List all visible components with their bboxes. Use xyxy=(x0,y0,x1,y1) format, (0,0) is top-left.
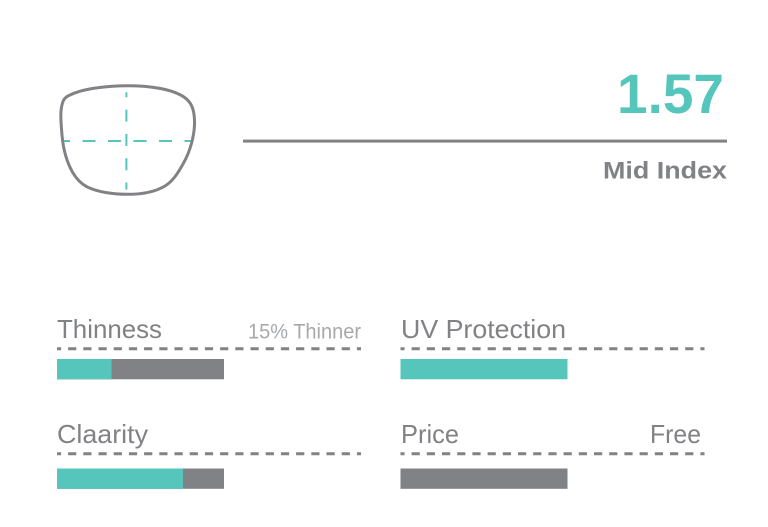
price label: Price xyxy=(401,419,459,449)
thinness label: Thinness xyxy=(57,314,162,344)
panel: clarity xyxy=(57,419,361,489)
price value: Free xyxy=(650,419,701,449)
clarity label: Claarity xyxy=(57,419,148,449)
clarity bar xyxy=(57,468,224,489)
thinness value: 15% Thinner xyxy=(248,320,361,344)
UV protection bar xyxy=(400,359,568,379)
UV protection label: UV Protection xyxy=(401,314,566,344)
panel: thinness xyxy=(57,314,361,379)
panel: price xyxy=(400,419,704,489)
price bar xyxy=(400,468,568,489)
index name: Mid Index xyxy=(603,158,728,184)
icon: lens with centre crosshair xyxy=(61,86,195,194)
header divider line xyxy=(243,140,727,143)
thinness bar xyxy=(57,359,224,379)
index value: 1.57 xyxy=(617,62,724,125)
panel: UV protection xyxy=(400,314,704,379)
